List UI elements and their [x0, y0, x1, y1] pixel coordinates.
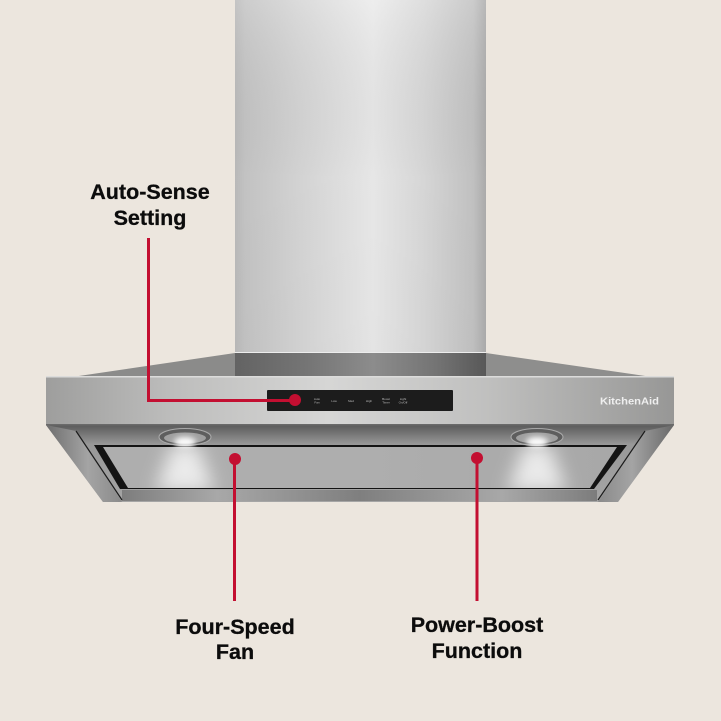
left light [155, 428, 215, 492]
control panel: On/Off [399, 400, 408, 404]
control panel: Light [400, 397, 406, 401]
control panel [267, 390, 453, 411]
callout line: auto-sense [148, 238, 301, 406]
chimney duct [235, 0, 486, 354]
filter panel [103, 447, 617, 488]
hood front band [46, 376, 674, 426]
label: four-speed fan: Four-Speed [175, 615, 295, 639]
label: four-speed fan: Fan [216, 640, 254, 664]
edge lines [76, 431, 122, 500]
control panel: Fan [314, 400, 320, 404]
lower strip [122, 490, 597, 501]
label: auto-sense setting: Setting [114, 206, 186, 230]
control panel: High [366, 399, 372, 403]
hood underside [46, 425, 674, 502]
label: power-boost function: Function [432, 639, 522, 663]
control panel: Med [348, 399, 354, 403]
label: power-boost function: Power-Boost [411, 613, 543, 637]
filter recess [94, 445, 627, 489]
left side panel [46, 425, 122, 502]
hood canopy top [72, 353, 652, 377]
callout line: four-speed fan [229, 453, 241, 601]
brand logo: KitchenAid [600, 396, 659, 408]
infographic: range hood features [46, 0, 674, 660]
right light [507, 428, 567, 492]
panel button labels: Auto [314, 397, 320, 401]
callout line: power-boost [471, 452, 483, 601]
label: auto-sense setting: Auto-Sense [90, 180, 210, 204]
right side panel [598, 425, 674, 502]
control panel: Timer [382, 400, 390, 404]
control panel: Low [331, 399, 338, 403]
control panel: Boost [382, 397, 390, 401]
